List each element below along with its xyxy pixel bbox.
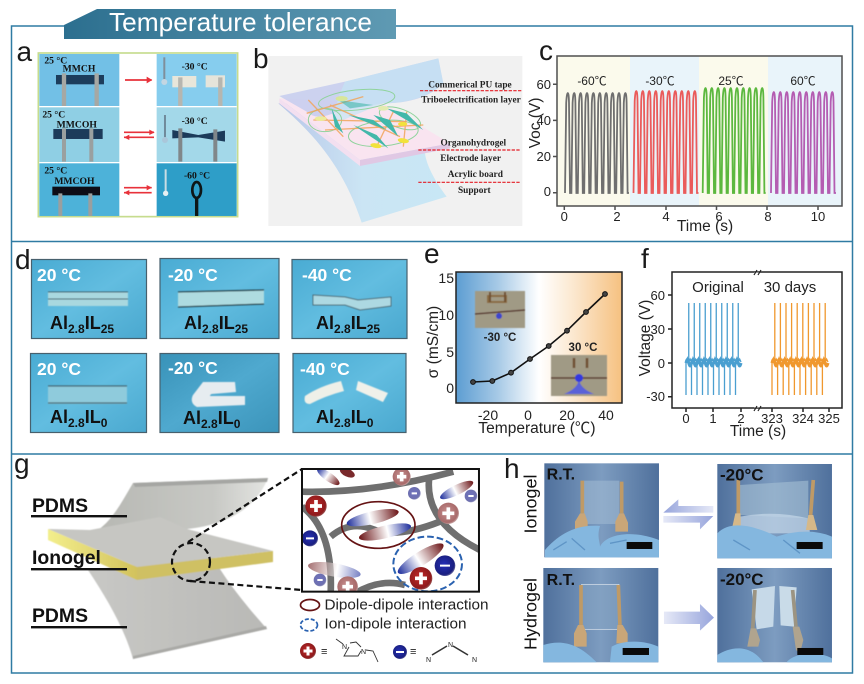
photo hydrogel -20 C: -20°C	[720, 570, 764, 589]
y axis title: Voltage (V)	[637, 300, 654, 376]
sample names: 2.8	[202, 322, 219, 336]
photo hydrogel -20 C	[717, 568, 832, 662]
temperature labels: 25℃	[718, 74, 744, 88]
x tick labels: 323	[761, 411, 783, 426]
y tick labels	[438, 270, 454, 396]
temperature labels: -60℃	[577, 74, 607, 88]
title banner: Temperature tolerance	[109, 7, 372, 37]
photo ionogel -20 C: -20°C	[720, 466, 764, 485]
temperature captions: -40 °C	[300, 359, 350, 379]
x tick labels: 0	[682, 411, 690, 426]
layered device illustration: Triboelectrification layer	[421, 95, 521, 105]
x tick labels: 2	[613, 209, 621, 224]
sample names: Al	[316, 313, 334, 333]
y tick labels: 60	[651, 288, 665, 303]
photo ionogel -20 C	[717, 464, 832, 558]
panel c: Voc versus time chart	[527, 35, 842, 235]
layered sandwich illustration	[48, 478, 273, 659]
x tick labels: -20	[478, 407, 498, 423]
y tick labels: 0	[446, 380, 454, 396]
30 days trace	[772, 303, 828, 395]
temperature labels: -30℃	[645, 74, 675, 88]
label c: c	[539, 35, 553, 66]
panel f: voltage stability chart	[637, 243, 842, 440]
photo grid a: MMCH	[63, 63, 96, 74]
series labels	[692, 279, 816, 296]
panel g: sandwich structure and interactions	[14, 448, 488, 664]
sample photographs	[30, 258, 407, 432]
label f: f	[641, 243, 649, 274]
y tick labels: 5	[446, 344, 454, 360]
inset caption 30 C: 30 °C	[569, 342, 597, 354]
photo grid a: -30 °C	[182, 116, 208, 127]
sample names: IL	[219, 313, 235, 333]
label b: b	[253, 43, 269, 74]
photo grid a: 25 °C	[44, 55, 67, 66]
sample names: 2.8	[68, 322, 85, 336]
x tick labels: 0	[524, 407, 532, 423]
photo hydrogel room temperature: R.T.	[547, 572, 575, 589]
y tick labels: 10	[438, 307, 454, 323]
y tick labels: -30	[646, 389, 665, 404]
magnified network inset	[302, 465, 480, 597]
temperature bands	[557, 56, 842, 206]
chart axes	[553, 56, 842, 210]
anion structure: N	[448, 642, 453, 649]
cation structure: N	[342, 644, 347, 651]
panel b: device layer schematic	[253, 43, 522, 226]
inset caption -30 C: -30 °C	[484, 332, 516, 344]
x tick labels: 325	[818, 411, 840, 426]
series labels: 30 days	[764, 279, 816, 296]
sample names: IL	[85, 313, 101, 333]
label g: g	[14, 448, 30, 479]
x axis title: Time (s)	[730, 423, 786, 440]
sample names: 2.8	[334, 322, 351, 336]
y tick labels: 15	[438, 270, 454, 286]
layered device illustration: Organohydrogel	[440, 138, 507, 148]
sample names: 0	[367, 416, 374, 430]
dipole-dipole legend: Dipole-dipole interaction	[324, 598, 488, 614]
sample names: 2.8	[334, 416, 351, 430]
x tick labels: 20	[559, 407, 575, 423]
photo ionogel room temperature: R.T.	[547, 466, 575, 483]
polymer network	[302, 472, 480, 593]
sample names: IL	[351, 407, 367, 427]
temperature captions: -20 °C	[168, 265, 218, 285]
layer labels	[31, 495, 127, 628]
x tick labels: 1	[709, 411, 717, 426]
y axis title: σ (mS/cm)	[425, 306, 442, 378]
x tick labels: 40	[598, 407, 614, 423]
layer labels: Ionogel	[32, 547, 101, 569]
sample names: 0	[234, 417, 241, 431]
photo grid a: MMCOH	[54, 176, 95, 187]
x tick labels: 0	[561, 209, 568, 224]
conductivity curve	[471, 292, 607, 384]
x axis title: Temperature (℃)	[478, 420, 596, 437]
ions	[302, 468, 477, 597]
sample names: 25	[101, 322, 114, 336]
label d: d	[15, 244, 31, 275]
sample names: IL	[218, 408, 234, 428]
photo grid a: MMCOH	[57, 120, 97, 131]
panel a: sample photographs	[16, 36, 238, 217]
x tick labels	[682, 411, 840, 426]
interaction legend	[300, 598, 488, 664]
panel h: ionogel and hydrogel photographs	[504, 453, 832, 662]
photo grid a: -30 °C	[182, 61, 208, 72]
dipoles	[307, 465, 475, 581]
temperature captions: 20 °C	[37, 359, 81, 379]
layer labels: PDMS	[32, 605, 88, 627]
temperature captions	[37, 265, 352, 379]
sample names: 2.8	[68, 416, 85, 430]
x tick labels: 6	[715, 209, 723, 224]
temperature labels: 60℃	[790, 74, 816, 88]
sample names: 0	[101, 416, 108, 430]
voltage traces	[565, 88, 836, 193]
x tick labels: 10	[811, 209, 825, 224]
cation structure	[300, 639, 378, 662]
temperature labels	[577, 74, 816, 88]
x tick labels: 4	[662, 209, 670, 224]
temperature captions: -20 °C	[168, 358, 218, 378]
sample names	[50, 313, 380, 431]
interaction outlines	[342, 502, 462, 591]
axis tick labels: 40	[537, 113, 551, 128]
anion structure: N	[472, 657, 477, 664]
photo grid a: 25 °C	[44, 165, 67, 176]
original trace	[686, 303, 741, 395]
anion structure: ≡	[410, 646, 416, 658]
cation structure: N	[361, 649, 366, 656]
row label hydrogel: Hydrogel	[521, 578, 541, 650]
layered device illustration	[268, 56, 522, 226]
panel d: ionogel strips at temperatures	[15, 244, 407, 432]
sample names: Al	[184, 313, 202, 333]
x axis title: Time (s)	[677, 218, 733, 235]
x tick labels: 2	[737, 411, 745, 426]
layered device illustration: Support	[458, 186, 492, 196]
inset photo 30 C	[551, 355, 607, 396]
temperature captions: -40 °C	[302, 265, 352, 285]
one-way arrow	[664, 604, 714, 631]
sample names: Al	[183, 408, 201, 428]
y tick labels	[646, 288, 665, 404]
plot background	[456, 272, 622, 403]
sample names: 25	[367, 322, 380, 336]
x tick labels	[561, 209, 825, 224]
sample names: Al	[50, 313, 68, 333]
panel e: conductivity versus temperature chart	[424, 238, 622, 437]
layer labels: PDMS	[32, 495, 88, 517]
sample names: Al	[50, 407, 68, 427]
label h: h	[504, 453, 520, 484]
photo ionogel room temperature	[544, 463, 659, 557]
photo grid a	[38, 53, 238, 217]
photo grid a: -60 °C	[184, 170, 210, 181]
x tick labels: 324	[792, 411, 814, 426]
sample names: 2.8	[201, 417, 218, 431]
label a: a	[16, 36, 32, 67]
axis tick labels: 60	[537, 77, 551, 92]
sample names: 25	[235, 322, 248, 336]
anion structure	[393, 642, 477, 664]
axis tick labels: 0	[544, 184, 551, 199]
sample names: IL	[85, 407, 101, 427]
label e: e	[424, 238, 440, 269]
layered device illustration: Electrode layer	[440, 154, 501, 164]
row label ionogel: Ionogel	[521, 474, 541, 534]
photo grid a: 25 °C	[42, 109, 65, 120]
x tick labels	[478, 407, 614, 423]
magnifier callout	[172, 469, 302, 590]
x tick labels: 8	[764, 209, 772, 224]
axis tick labels: 20	[537, 149, 551, 164]
cation structure: ≡	[321, 646, 327, 658]
photo hydrogel room temperature	[543, 568, 658, 662]
axis tick labels	[537, 77, 551, 199]
reversible arrows	[663, 499, 713, 529]
anion structure: N	[426, 657, 431, 664]
layered device illustration: Acrylic board	[448, 170, 504, 180]
series labels: Original	[692, 279, 744, 296]
layered device illustration: Commerical PU tape	[428, 81, 512, 91]
temperature captions: 20 °C	[37, 265, 81, 285]
y tick labels: 30	[651, 322, 665, 337]
y axis title: Voc (V)	[527, 98, 544, 148]
inset photo -30 C	[475, 291, 525, 328]
sample names: IL	[351, 313, 367, 333]
ion-dipole legend: Ion-dipole interaction	[324, 616, 466, 632]
y tick labels: 0	[658, 356, 665, 371]
plot frame	[668, 270, 842, 412]
sample names: Al	[316, 407, 334, 427]
